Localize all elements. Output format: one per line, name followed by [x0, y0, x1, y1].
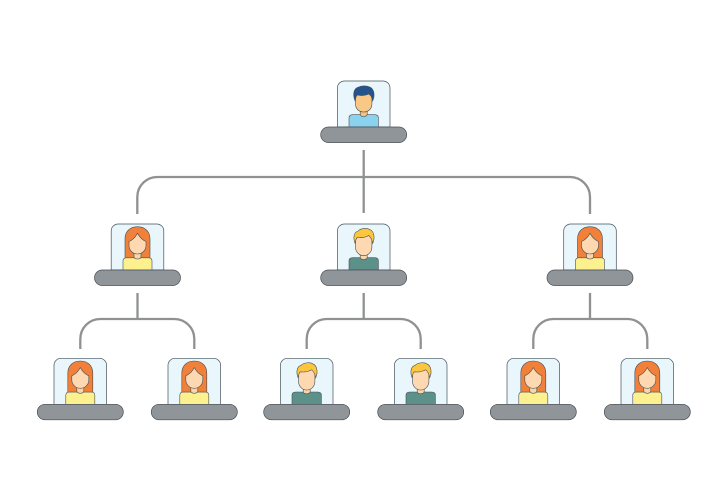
node: staff man 2 — [378, 358, 464, 420]
connector: right team — [533, 293, 647, 349]
node: staff woman 1 — [37, 358, 123, 420]
node: root man with blue hair — [321, 81, 407, 142]
node: manager woman left — [94, 224, 180, 286]
node: staff woman 2 — [151, 358, 237, 420]
node: manager man middle — [321, 224, 407, 286]
node: staff man 1 — [264, 358, 350, 420]
node: staff woman 3 — [490, 358, 576, 420]
connector: root to managers — [137, 150, 590, 214]
node: staff woman 4 — [604, 358, 690, 420]
connector: left team — [80, 293, 194, 349]
connector: middle team — [307, 293, 421, 349]
node: manager woman right — [547, 224, 633, 286]
